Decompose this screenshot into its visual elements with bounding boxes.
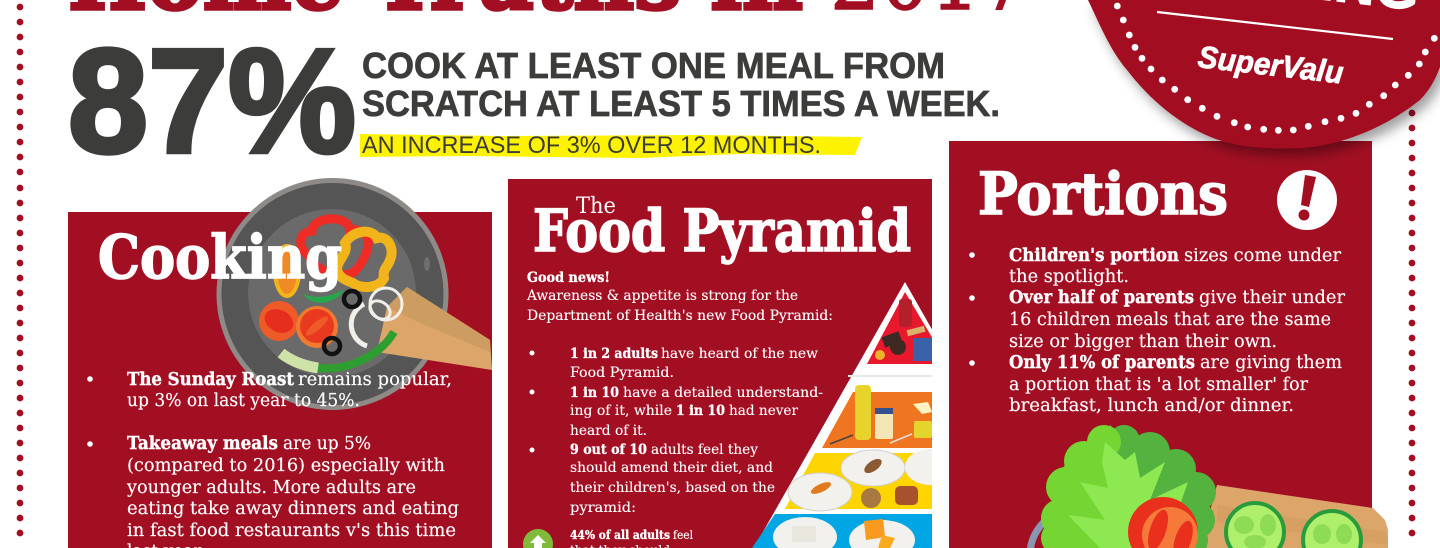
bullet: 1 in 10 [530, 385, 823, 439]
badge: SuperValu seal [1088, 0, 1440, 148]
intro text: Awareness & appetite is strong for the [526, 288, 798, 304]
bullet: sunday roast [87, 370, 452, 411]
tomato slices [259, 301, 338, 348]
bullet: only 11% of parents: Only 11% of parents [1009, 353, 1195, 373]
bullet: only 11% of parents [969, 353, 1342, 416]
stat: 44% of all adults [570, 528, 693, 548]
bullet: takeaway meals: eating take away dinners and eating [127, 499, 459, 519]
bullet: 9 out of 10: adults feel they [651, 442, 758, 458]
bullet: sunday roast: up 3% on last year to 45%. [127, 391, 360, 411]
icon: green up arrow [523, 529, 553, 548]
heading: cooking: Cooking [98, 223, 342, 293]
tier: treats [867, 292, 932, 364]
headline statistic text: SCRATCH AT LEAST 5 TIMES A WEEK. [362, 83, 1000, 124]
bullet: 1 in 10: had never [729, 403, 798, 419]
bullet: 1 in 10: ing of it, while [570, 403, 672, 419]
bullet: 9 out of 10: should amend their diet, and [570, 460, 773, 476]
illustration: salad on chopping board [1030, 425, 1388, 548]
icon: exclamation mark [1277, 170, 1337, 230]
bullet: 1 in 2 adults: have heard of the new [661, 346, 818, 362]
bullet: sunday roast: remains popular, [298, 370, 452, 390]
bullet: over half of parents: 16 children meals that are the same [1009, 310, 1331, 330]
bullet: children's portion [969, 246, 1342, 287]
bullet: 1 in 10: have a detailed understand- [623, 385, 823, 401]
bullet: takeaway meals: in fast food restaurants v's this time [127, 521, 456, 541]
bullet: only 11% of parents: breakfast, lunch and/or dinner. [1009, 396, 1294, 416]
bullet: children's portion: sizes come under [1184, 246, 1342, 266]
chopping board [1200, 485, 1388, 548]
heading: the food pyramid: The [576, 194, 616, 219]
tier: fats [822, 385, 940, 448]
bullet: 9 out of 10 [530, 442, 775, 516]
tier: dairy [752, 514, 940, 548]
heading: the food pyramid: Food Pyramid [533, 197, 911, 265]
dotted border: right [1409, 110, 1415, 536]
yellow pepper [337, 232, 392, 287]
headline statistic text [362, 45, 1000, 124]
bullet: only 11% of parents: are giving them [1200, 353, 1342, 373]
headline statistic text: COOK AT LEAST ONE MEAL FROM [362, 45, 945, 86]
heading: portions: Portions [978, 160, 1228, 228]
bullet: takeaway meals: Takeaway meals [127, 434, 278, 454]
bullet: takeaway meals: (compared to 2016) especially with [127, 456, 445, 476]
bullet: takeaway meals [87, 434, 459, 548]
bullet: sunday roast: The Sunday Roast [127, 370, 294, 390]
bullet: children's portion: the spotlight. [1009, 267, 1129, 287]
lettuce [1041, 425, 1216, 548]
bullet: 9 out of 10: pyramid: [570, 500, 636, 516]
bullet: over half of parents: Over half of parents [1009, 288, 1194, 308]
big statistic: 87%: 87% [68, 19, 356, 184]
intro text: Good news! [527, 270, 610, 286]
stat: 44% of all adults: 44% of all adults [570, 528, 670, 542]
bullet: 1 in 2 adults: Food Pyramid. [570, 365, 674, 381]
panel: portions [949, 141, 1388, 548]
bullet: 9 out of 10: their children's, based on the [570, 480, 775, 496]
red pepper [301, 219, 368, 275]
tomato half [1128, 497, 1198, 548]
bullet: 1 in 10: 1 in 10 [676, 403, 725, 419]
bullet: 1 in 2 adults [530, 346, 818, 381]
bullet: 1 in 10: 1 in 10 [570, 385, 619, 401]
tier: white separator [848, 375, 938, 377]
badge logo: SuperValu [1196, 39, 1345, 90]
cucumber slices [1226, 503, 1361, 548]
panel: cooking [68, 178, 492, 548]
highlighted subline: AN INCREASE OF 3% OVER 12 MONTHS. [362, 132, 821, 159]
bullet: takeaway meals: are up 5% [283, 434, 371, 454]
bullet: takeaway meals: younger adults. More adults are [126, 478, 416, 498]
food pyramid graphic [752, 282, 932, 548]
stat: 44% of all adults: feel [673, 528, 693, 542]
illustration: frying pan [216, 178, 492, 410]
bullet: 1 in 2 adults: 1 in 2 adults [570, 346, 658, 362]
bullet: over half of parents: size or bigger than their own. [1009, 332, 1277, 352]
intro text [526, 270, 833, 324]
bullet: over half of parents [969, 288, 1346, 352]
bullet: 9 out of 10: 9 out of 10 [570, 442, 647, 458]
intro text: Department of Health's new Food Pyramid: [527, 308, 833, 324]
bullet: 1 in 10: heard of it. [570, 423, 647, 439]
tier: protein [785, 449, 932, 512]
bullet: only 11% of parents: a portion that is 'a lot smaller' for [1009, 375, 1309, 395]
spatula [377, 287, 492, 370]
bullet: over half of parents: give their under [1199, 288, 1346, 308]
badge dotted ring [1114, 3, 1438, 134]
dotted border: left [17, 4, 23, 536]
panel: food pyramid [508, 179, 932, 548]
bullet: children's portion: Children's portion [1009, 246, 1179, 266]
